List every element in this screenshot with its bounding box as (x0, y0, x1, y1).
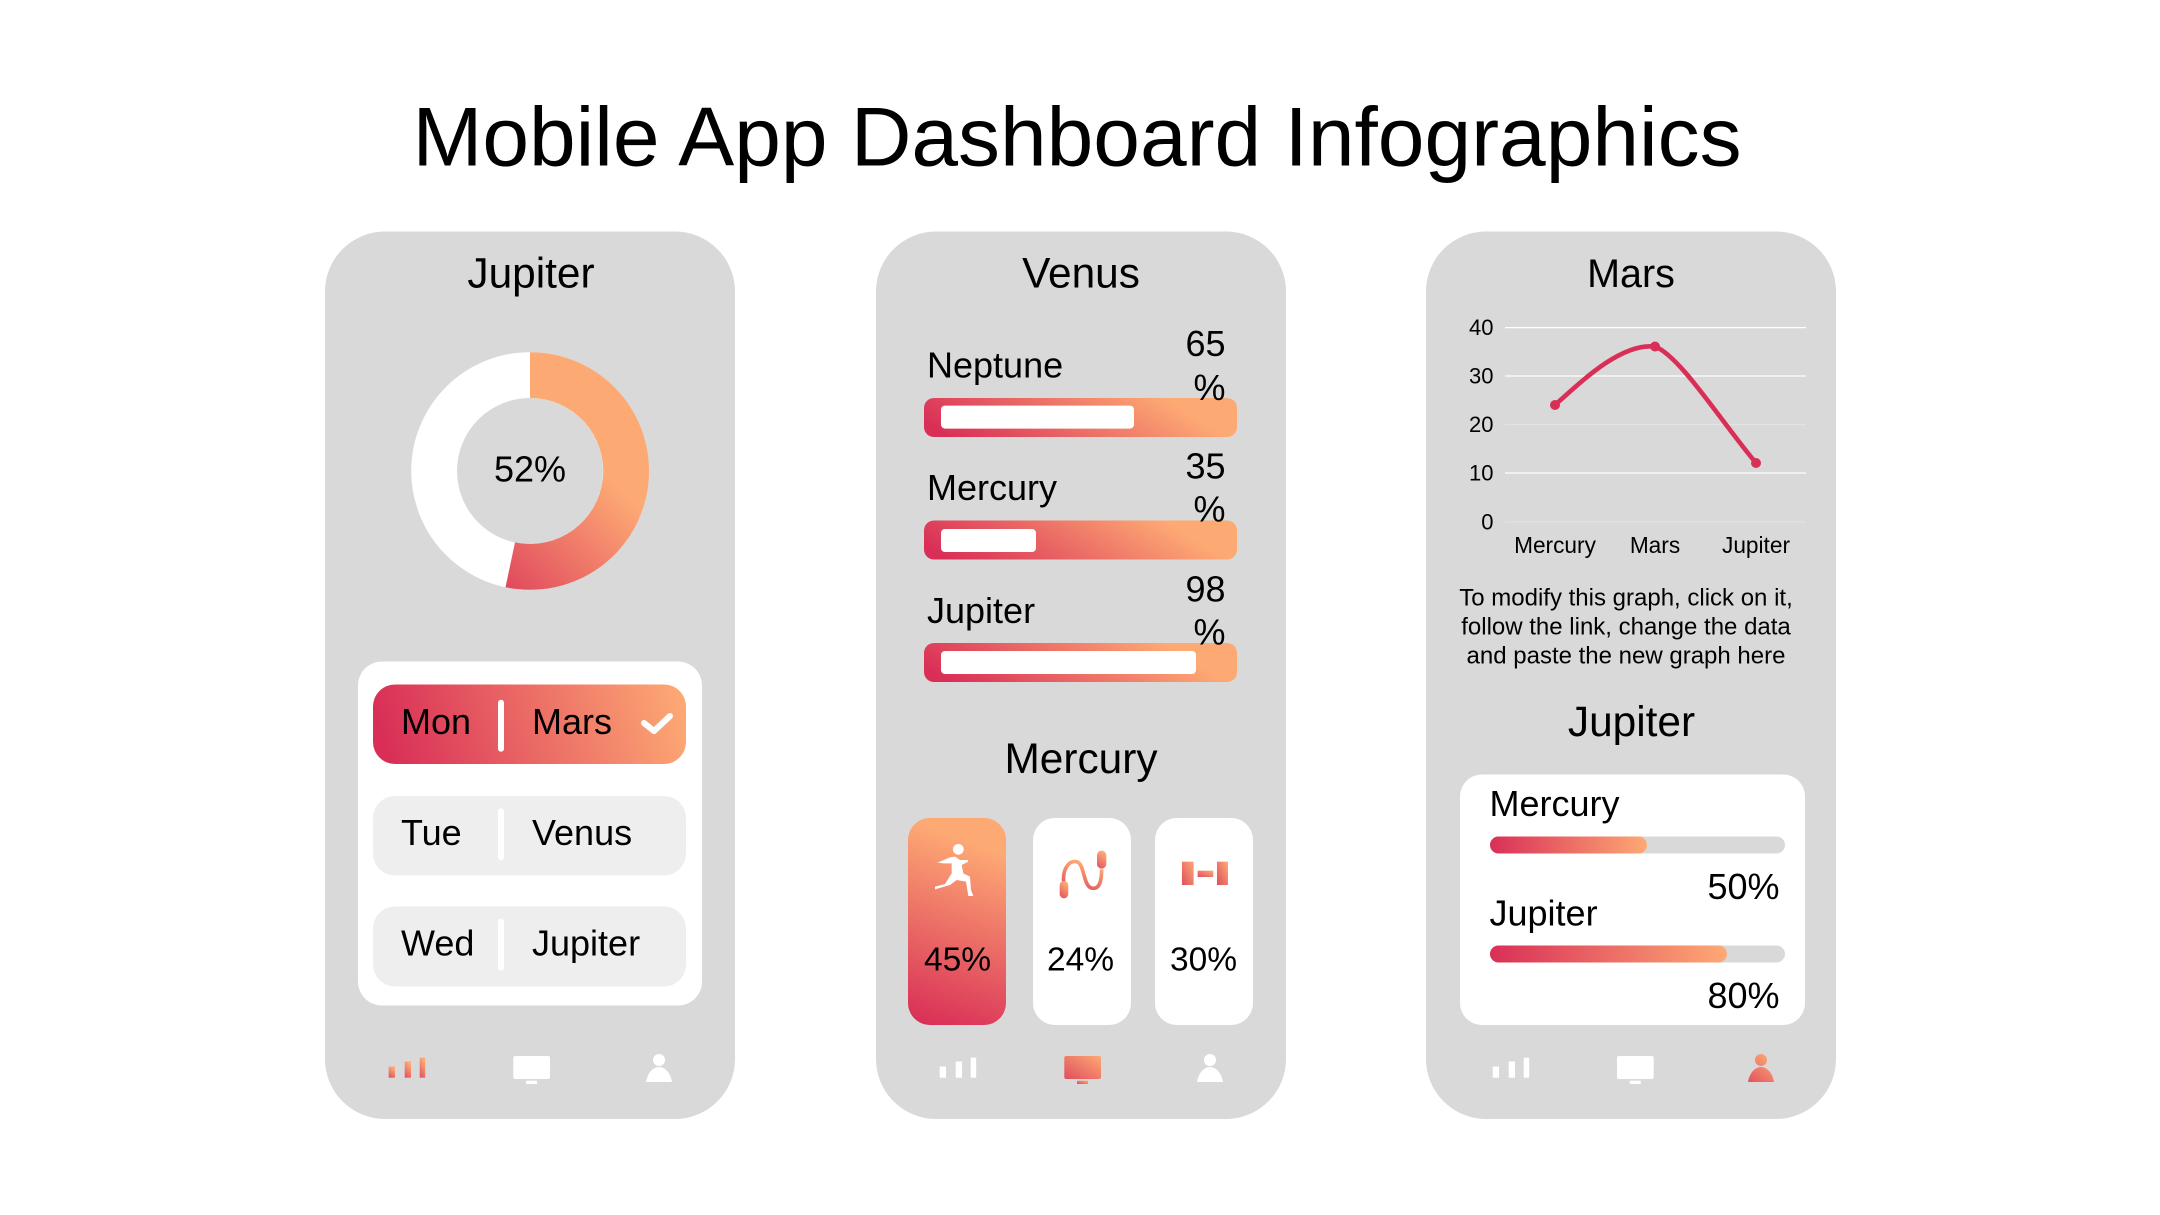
row: Mon Mars: Mars (532, 701, 612, 742)
line chart: 40 (1469, 315, 1494, 340)
row: Tue Venus: Tue (401, 812, 462, 853)
progress: Mercury: Mercury (927, 467, 1057, 508)
progress: Neptune: % (1193, 367, 1226, 408)
panel: Venus phone (876, 232, 1286, 1119)
row: Mon Mars: Mon (401, 701, 471, 742)
progress: Mercury: % (1193, 489, 1226, 530)
progress: Jupiter: 98 (1185, 569, 1226, 610)
progress: Neptune: 65 (1185, 323, 1226, 364)
progress: Mercury 50%: Mercury (1490, 783, 1620, 824)
line chart: 30 (1469, 364, 1494, 388)
progress: Mercury: 35 (1185, 446, 1226, 487)
progress: Mercury 50%: 50% (1707, 866, 1780, 907)
progress: Jupiter 80% (1490, 892, 1785, 1016)
stat card: 24% skipping rope (1033, 818, 1131, 1025)
stat card: 45% running (908, 818, 1006, 1025)
row: Tue Venus: Venus (532, 812, 632, 853)
donut chart (434, 352, 649, 590)
icon: bars (940, 1058, 976, 1078)
progress card (1460, 774, 1805, 1025)
icon: monitor (active) (1064, 1056, 1101, 1084)
progress: Jupiter 80%: Jupiter (1490, 892, 1598, 934)
line chart: 0 (1481, 510, 1494, 534)
icon: bars (active) (389, 1058, 425, 1078)
icon: person (1197, 1054, 1223, 1082)
progress: Jupiter: % (1193, 612, 1226, 653)
line chart: Mercury (1514, 532, 1597, 558)
progress: Mercury 50% (1490, 783, 1785, 907)
row: Wed Jupiter (373, 906, 686, 986)
progress: Jupiter (924, 569, 1237, 682)
heading: Mercury: Mercury (1004, 735, 1158, 782)
icon: dumbbell (1182, 862, 1228, 885)
heading: Venus: Venus (1022, 250, 1140, 296)
row: Wed Jupiter: Jupiter (532, 922, 640, 964)
title: Mobile App Dashboard Infographics (412, 90, 1742, 184)
heading: Mars: Mars (1587, 252, 1675, 296)
icon: bars (1493, 1058, 1529, 1078)
panel: Mars phone (1426, 232, 1836, 1119)
row: Wed Jupiter: Wed (401, 922, 474, 964)
stat card: 30% dumbbell: 30% (1170, 942, 1237, 978)
progress: Neptune (924, 323, 1237, 437)
progress: Jupiter: Jupiter (927, 590, 1035, 631)
stat card: 30% dumbbell (1155, 818, 1253, 1025)
line chart: Jupiter (1722, 532, 1790, 558)
progress: Neptune: Neptune (927, 345, 1063, 386)
row: Mon Mars (373, 684, 686, 764)
note text (1459, 585, 1793, 670)
line chart: Mars (1630, 532, 1680, 558)
icon: monitor (1617, 1056, 1654, 1084)
note text: follow the link, change the data (1461, 614, 1791, 641)
icon: skipping rope (1060, 851, 1106, 898)
icon: runner (935, 844, 973, 896)
note text: To modify this graph, click on it, (1459, 585, 1793, 612)
schedule card (358, 662, 702, 1006)
icon: person (646, 1054, 672, 1082)
progress: Mercury (924, 446, 1237, 560)
heading: Jupiter: Jupiter (467, 250, 595, 296)
icon: check (644, 716, 670, 731)
stat card: 24% skipping rope: 24% (1047, 942, 1114, 978)
stat card: 45% running: 45% (924, 942, 991, 978)
heading: Jupiter: Jupiter (1568, 698, 1695, 745)
donut value: 52% (494, 448, 566, 490)
line series (1550, 342, 1761, 468)
row: Tue Venus (373, 796, 686, 876)
line chart: 10 (1469, 460, 1494, 486)
line chart: 20 (1469, 412, 1494, 437)
panel: Jupiter phone (325, 232, 735, 1119)
icon: monitor (513, 1056, 550, 1084)
note text: and paste the new graph here (1467, 643, 1785, 670)
line chart (1469, 315, 1806, 558)
icon: person (active) (1748, 1054, 1774, 1082)
progress: Jupiter 80%: 80% (1707, 975, 1780, 1016)
